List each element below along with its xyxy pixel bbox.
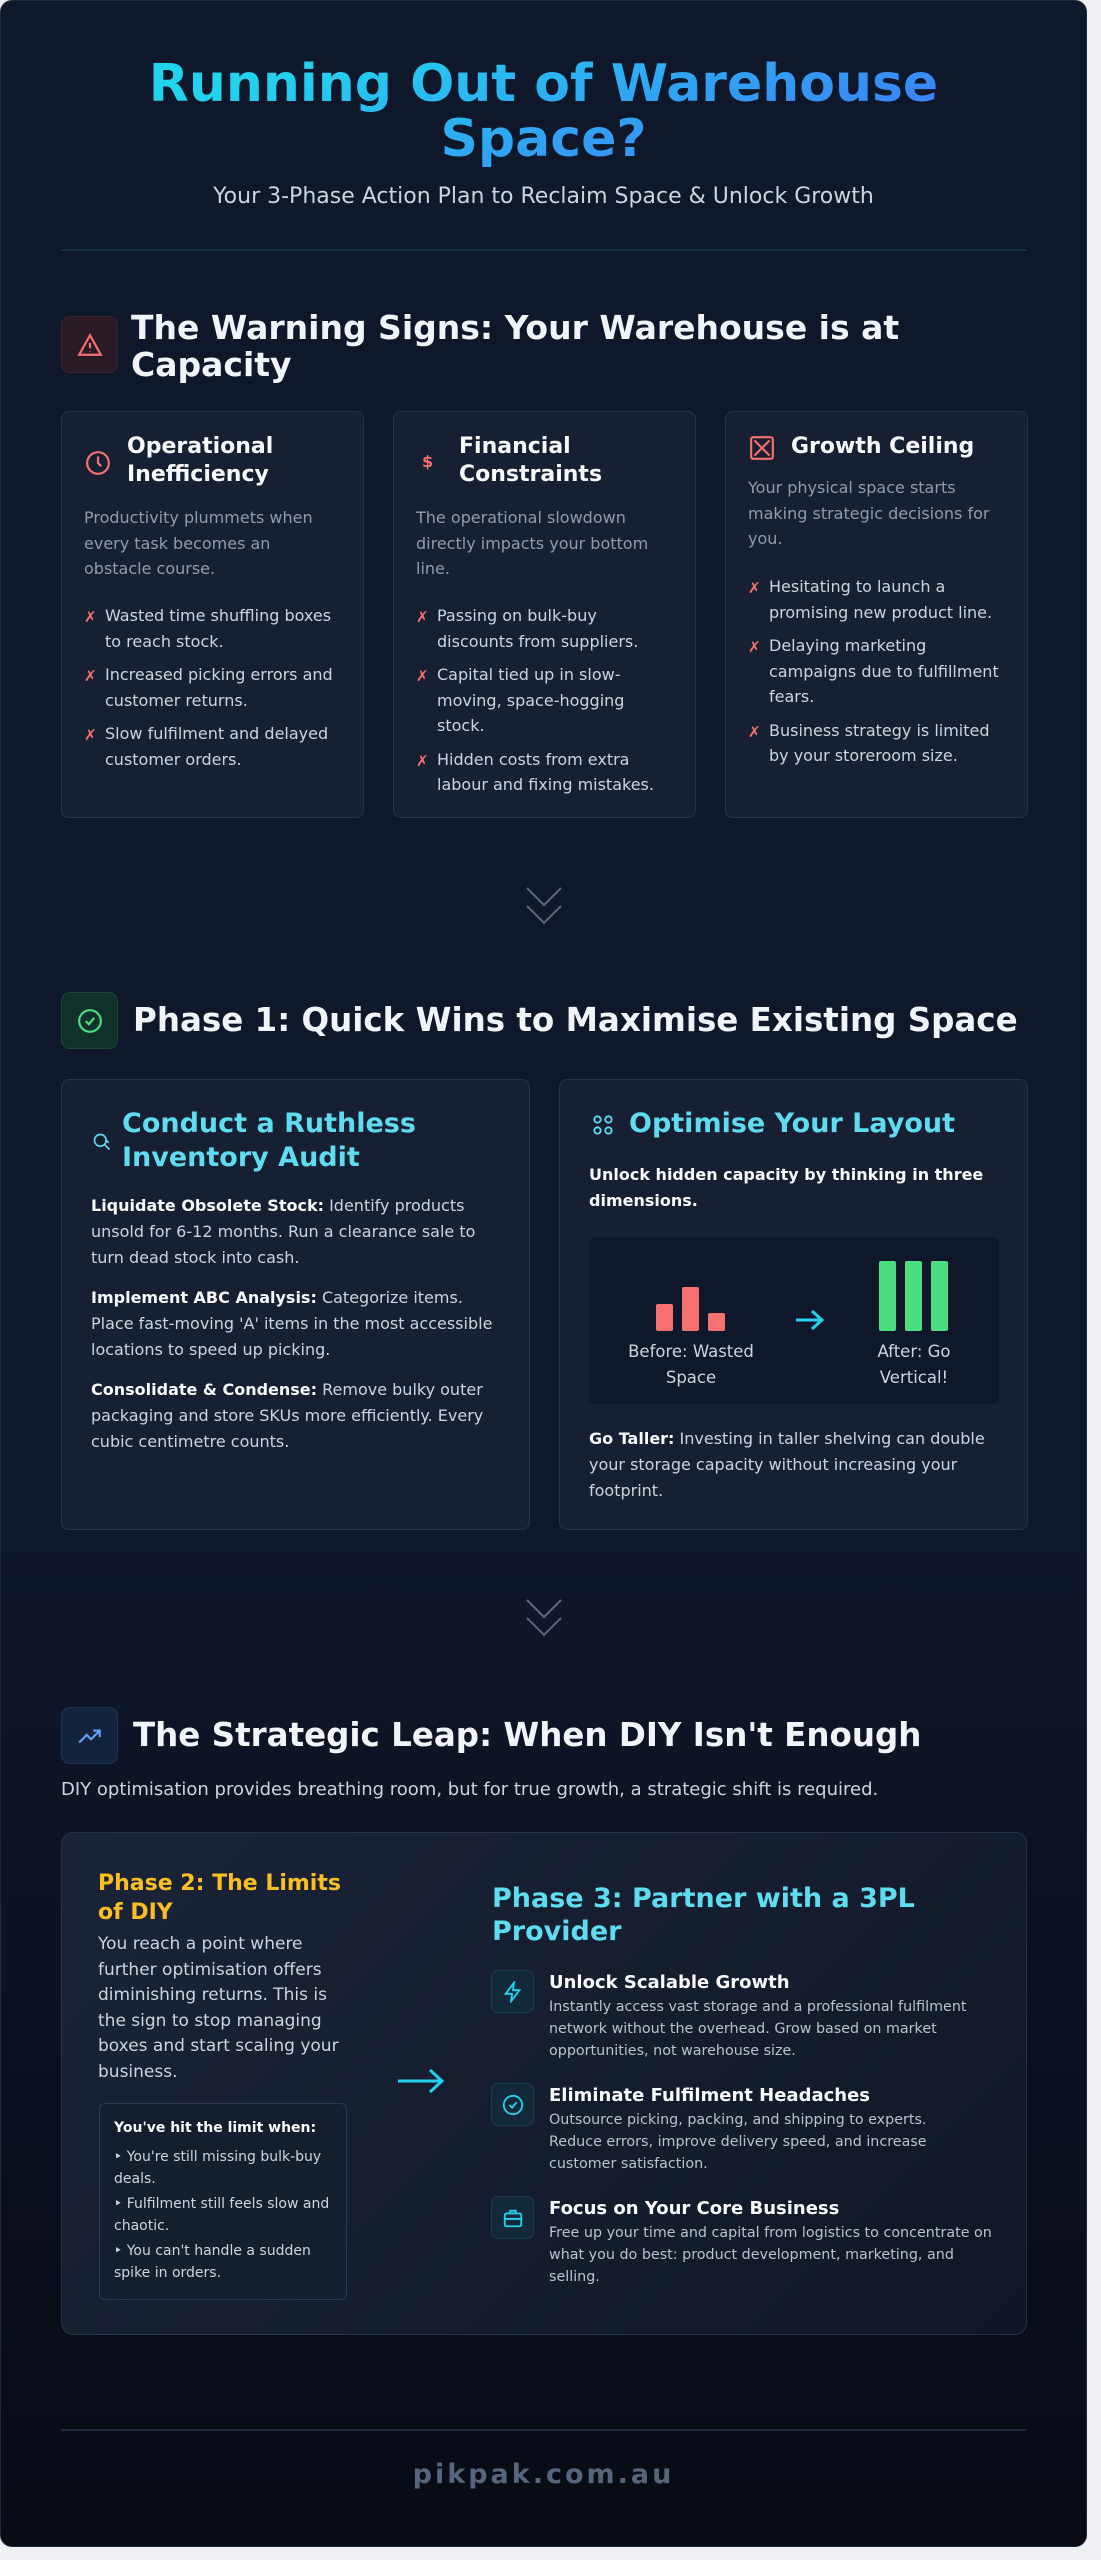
- panel: optimise layout: Optimise Your Layout: [629, 1108, 955, 1139]
- panel: inventory audit: Inventory Audit: [122, 1142, 360, 1173]
- main card: Free up your time and capital from logistics to concentrate on what you do best: product development, marketing, and selling.: [549, 2225, 992, 2285]
- panel: growth ceiling: ✗: [748, 638, 761, 656]
- panel: optimise layout: Go Taller: Investing in taller shelving can double your storage capacity without increasing your footprint.: [589, 1429, 985, 1500]
- main card: Focus on Your Core Business: [549, 2198, 839, 2219]
- panel: operational inefficiency: ✗: [84, 726, 97, 744]
- panel: financial constraints: ✗: [416, 667, 429, 685]
- panel: financial constraints: The operational slowdown directly impacts your bottom line.: [416, 508, 648, 578]
- icon: trend: [61, 1707, 118, 1764]
- main card: Instantly access vast storage and a professional fulfilment network without the overhead. Grow based on market opportunities, not warehouse size.: [549, 1999, 966, 2059]
- panel: growth ceiling: Hesitating to launch a promising new product line.: [769, 577, 992, 622]
- section heading: strategic leap: The Strategic Leap: When DIY Isn't Enough: [133, 1716, 921, 1754]
- icon: check: [61, 992, 118, 1049]
- icon: x box: [750, 436, 774, 460]
- panel: financial constraints: Passing on bulk-buy discounts from suppliers.: [437, 606, 638, 650]
- icon: warning: [61, 316, 118, 373]
- text: intro: DIY optimisation provides breathing room, but for true growth, a strategic shift is required.: [61, 1779, 878, 1800]
- panel: growth ceiling: ✗: [748, 722, 761, 740]
- section heading: warning signs: The Warning Signs: Your Warehouse is at Capacity: [131, 308, 899, 384]
- item: fulfilment headaches: [491, 2083, 927, 2172]
- panel: inventory audit: Consolidate & Condense: Remove bulky outer packaging and store SKUs more efficiently. Every cubic centimetre counts.: [91, 1380, 483, 1451]
- chart: before/after: [589, 1237, 999, 1404]
- icon: clock: [86, 451, 110, 475]
- panel: operational inefficiency: Wasted time shuffling boxes to reach stock.: [105, 606, 331, 650]
- panel: operational inefficiency: Productivity plummets when every task becomes an obstacle course.: [84, 508, 313, 578]
- panel: inventory audit: Implement ABC Analysis: Categorize items. Place fast-moving 'A' items in the most accessible locations to speed up picking.: [91, 1288, 492, 1359]
- item: core business: [491, 2196, 992, 2285]
- section heading: strategic leap: [61, 1707, 921, 1764]
- panel: growth ceiling: Delaying marketing campaigns due to fulfillment fears.: [769, 636, 999, 706]
- panel: growth ceiling: Your physical space starts making strategic decisions for you.: [748, 478, 989, 548]
- phase 3 title: Phase 3: Partner with a 3PL Provider: [492, 1883, 915, 1947]
- panel: growth ceiling: Growth Ceiling: [791, 434, 974, 459]
- panel: financial constraints: Capital tied up in slow-moving, space-hogging stock.: [437, 665, 624, 735]
- callout: limit box: You've hit the limit when:: [114, 2120, 316, 2136]
- panel: operational inefficiency: ✗: [84, 667, 97, 685]
- icon: dollar: $: [422, 452, 433, 471]
- panel: inventory audit: [61, 1079, 530, 1530]
- panel: financial constraints: Financial: [459, 434, 571, 459]
- panel: inventory audit: Conduct a Ruthless: [122, 1108, 416, 1139]
- callout: limit box: [99, 2103, 347, 2300]
- footer: pikpak.com.au: [413, 2459, 674, 2490]
- main card: Unlock Scalable Growth: [549, 1972, 790, 1993]
- panel: growth ceiling: Business strategy is limited by your storeroom size.: [769, 720, 990, 765]
- callout: limit box: ‣ You can't handle a sudden spike in orders.: [114, 2243, 311, 2281]
- panel: operational inefficiency: Inefficiency: [127, 462, 269, 487]
- panel: growth ceiling: ✗: [748, 579, 761, 597]
- section heading: phase 1: Phase 1: Quick Wins to Maximise Existing Space: [133, 1001, 1018, 1039]
- panel: operational inefficiency: Increased picking errors and customer returns.: [105, 665, 333, 710]
- arrow: [796, 1310, 824, 1330]
- panel: financial constraints: Constraints: [459, 462, 602, 487]
- subtitle: Your 3-Phase Action Plan to Reclaim Space & Unlock Growth: [213, 184, 874, 209]
- panel: financial constraints: [393, 411, 696, 818]
- arrow: chevron down 2: [526, 1599, 562, 1636]
- section heading: phase 1: [61, 992, 1018, 1049]
- main card: Eliminate Fulfilment Headaches: [549, 2085, 870, 2106]
- panel: financial constraints: ✗: [416, 752, 429, 770]
- icon: grid: [593, 1115, 613, 1135]
- chart: before/after: After: Go Vertical!: [877, 1342, 951, 1387]
- panel: inventory audit: Liquidate Obsolete Stock: Identify products unsold for 6-12 months. Run a clearance sale to turn dead stock into cash.: [91, 1196, 475, 1267]
- panel: phase 2 and 3: [61, 1832, 1027, 2335]
- panel: operational inefficiency: [61, 411, 364, 818]
- panel: growth ceiling: [725, 411, 1028, 818]
- panel: operational inefficiency: ✗: [84, 608, 97, 626]
- item: scalable growth: [491, 1970, 966, 2059]
- main card: Outsource picking, packing, and shipping to experts. Reduce errors, improve delivery speed, and increase customer satisfaction.: [549, 2112, 927, 2172]
- callout: limit box: ‣ You're still missing bulk-buy deals.: [114, 2149, 321, 2187]
- title: Running Out of Warehouse Space?: [149, 54, 938, 169]
- arrow: right: [398, 2069, 444, 2093]
- phase 2: Phase 2: The Limits of DIY: [98, 1871, 341, 1925]
- icon: search: [94, 1134, 110, 1150]
- phase 2: You reach a point where further optimisation offers diminishing returns. This is the sign to stop managing boxes and start scaling your business.: [98, 1934, 339, 2082]
- panel: financial constraints: ✗: [416, 608, 429, 626]
- panel: financial constraints: Hidden costs from extra labour and fixing mistakes.: [437, 750, 654, 794]
- panel: operational inefficiency: Operational: [127, 434, 273, 459]
- panel: optimise layout: Unlock hidden capacity by thinking in three dimensions.: [589, 1165, 983, 1210]
- panel: optimise layout: [559, 1079, 1028, 1530]
- arrow: chevron down 1: [526, 887, 562, 924]
- chart: before/after: Before: Wasted Space: [628, 1342, 754, 1387]
- panel: operational inefficiency: Slow fulfilment and delayed customer orders.: [105, 724, 328, 768]
- phase 2: [98, 1871, 341, 2082]
- callout: limit box: ‣ Fulfilment still feels slow and chaotic.: [114, 2196, 329, 2234]
